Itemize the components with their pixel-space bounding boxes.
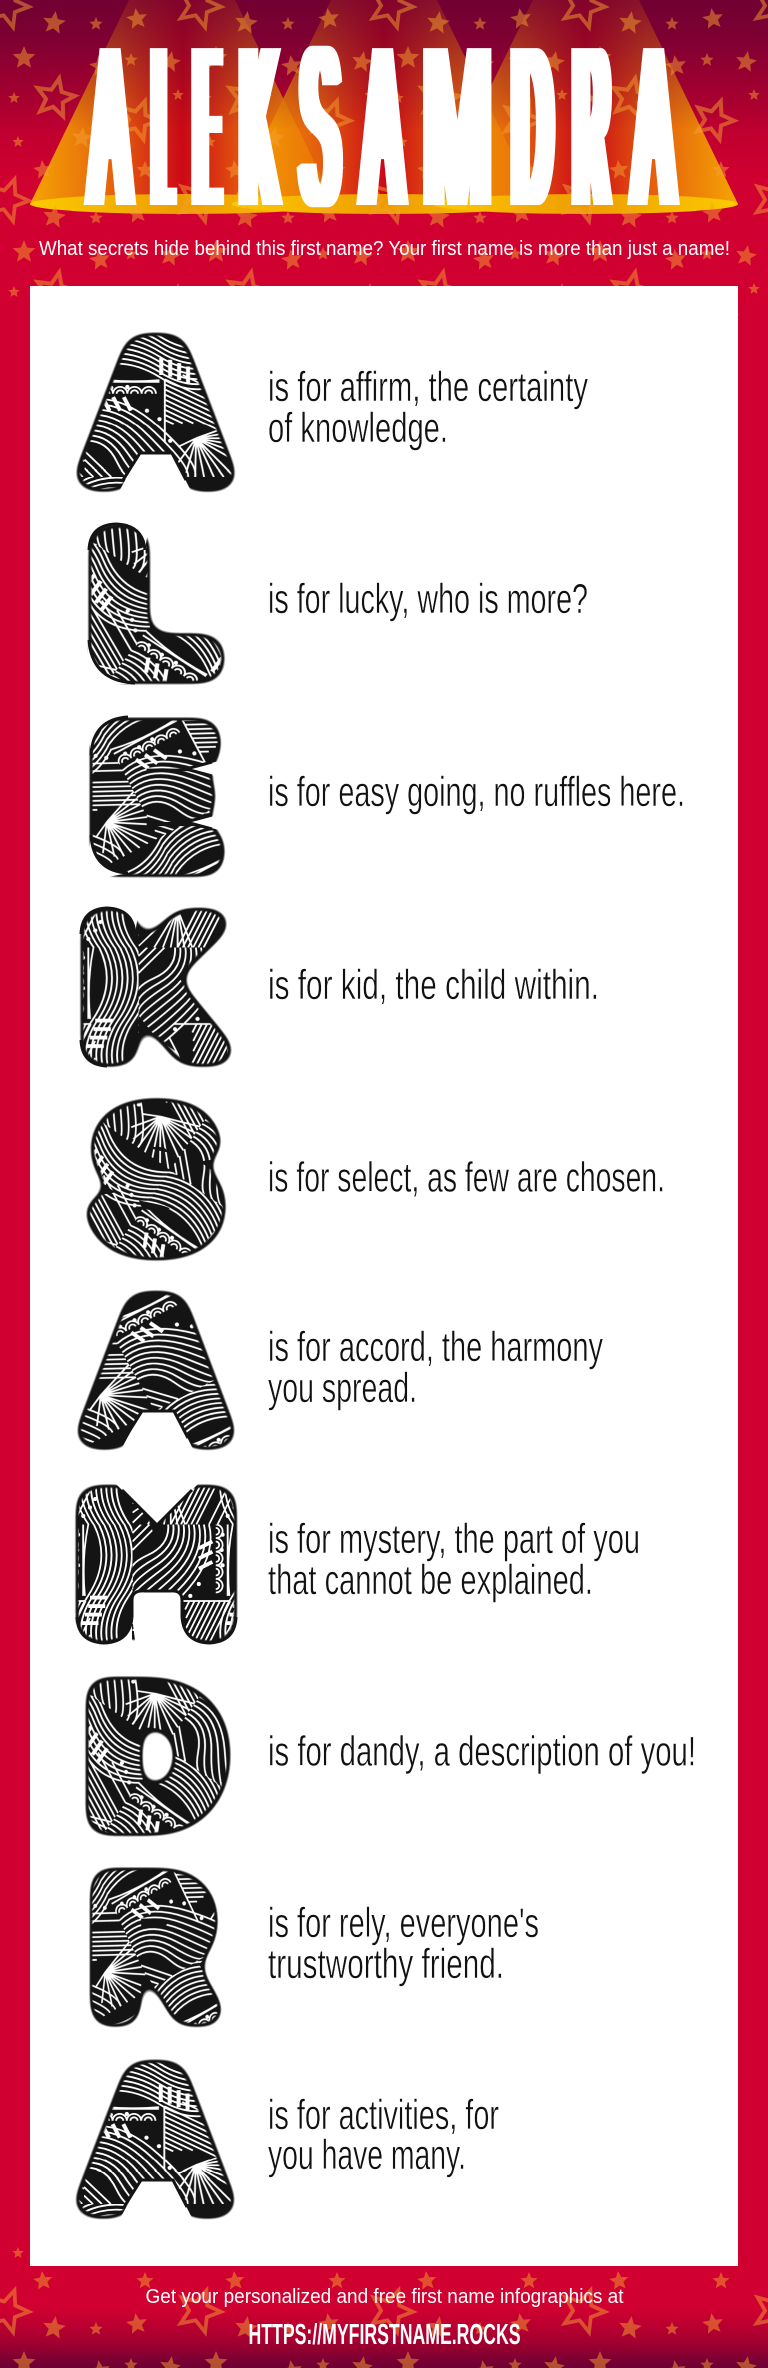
icon: doodle letter A: A	[84, 2034, 227, 2244]
text: A meaning: of knowledge.	[268, 404, 448, 451]
title	[91, 0, 673, 255]
title: E	[196, 0, 218, 254]
text: A meaning: is for affirm, the certainty	[268, 363, 588, 410]
star pattern: header	[0, 0, 768, 320]
text: A meaning: you spread.	[268, 1364, 417, 1411]
footer url: HTTPS://MYFIRSTNAME.ROCKS	[248, 2319, 520, 2351]
title: S	[302, 0, 338, 255]
icon: doodle letter R: R	[92, 1842, 214, 2052]
icon: doodle letter K: K	[83, 883, 221, 1093]
title: A	[91, 1, 129, 254]
row: A	[84, 307, 588, 517]
title: A	[364, 1, 402, 254]
text: A meaning: you have many.	[268, 2131, 466, 2178]
row: K	[76, 883, 599, 1093]
text: L meaning: is for lucky, who is more?	[268, 575, 588, 622]
icon: doodle letter A: A	[84, 307, 227, 517]
title: K	[242, 0, 276, 255]
row: A second	[86, 1264, 603, 1475]
footer line: Get your personalized and free first name infographics at	[146, 2286, 624, 2308]
row: R	[92, 1842, 539, 2052]
row: D	[88, 1651, 696, 1861]
icon: doodle letter A: A	[86, 1264, 227, 1475]
subtitle: What secrets hide behind this first name? Your first name is more than just a name!	[39, 238, 730, 260]
icon: doodle letter D: D	[88, 1651, 224, 1861]
title: R	[575, 0, 608, 254]
icon: doodle letter M: M	[78, 1459, 235, 1669]
star pattern: footer	[0, 2240, 768, 2368]
icon: doodle letter E: E	[92, 692, 217, 902]
text: R meaning: is for rely, everyone's	[268, 1899, 539, 1946]
row: E	[84, 692, 685, 902]
row: M	[72, 1459, 640, 1669]
title: L	[155, 0, 171, 254]
icon: doodle letter S: S	[94, 1074, 219, 1284]
icon: doodle letter L: L	[91, 500, 215, 709]
text: A meaning: is for accord, the harmony	[268, 1323, 603, 1370]
row: L	[84, 500, 588, 709]
row: A third	[84, 2034, 499, 2244]
panel: letters	[30, 286, 738, 2266]
text: R meaning: trustworthy friend.	[268, 1940, 504, 1987]
title: D	[514, 0, 551, 255]
title: A	[634, 1, 673, 254]
text: M meaning: that cannot be explained.	[268, 1556, 593, 1603]
title: M	[424, 0, 490, 254]
text: K meaning: is for kid, the child within.	[268, 961, 599, 1008]
spotlights	[0, 0, 768, 214]
row: S	[94, 1074, 665, 1284]
text: A meaning: is for activities, for	[268, 2091, 499, 2138]
